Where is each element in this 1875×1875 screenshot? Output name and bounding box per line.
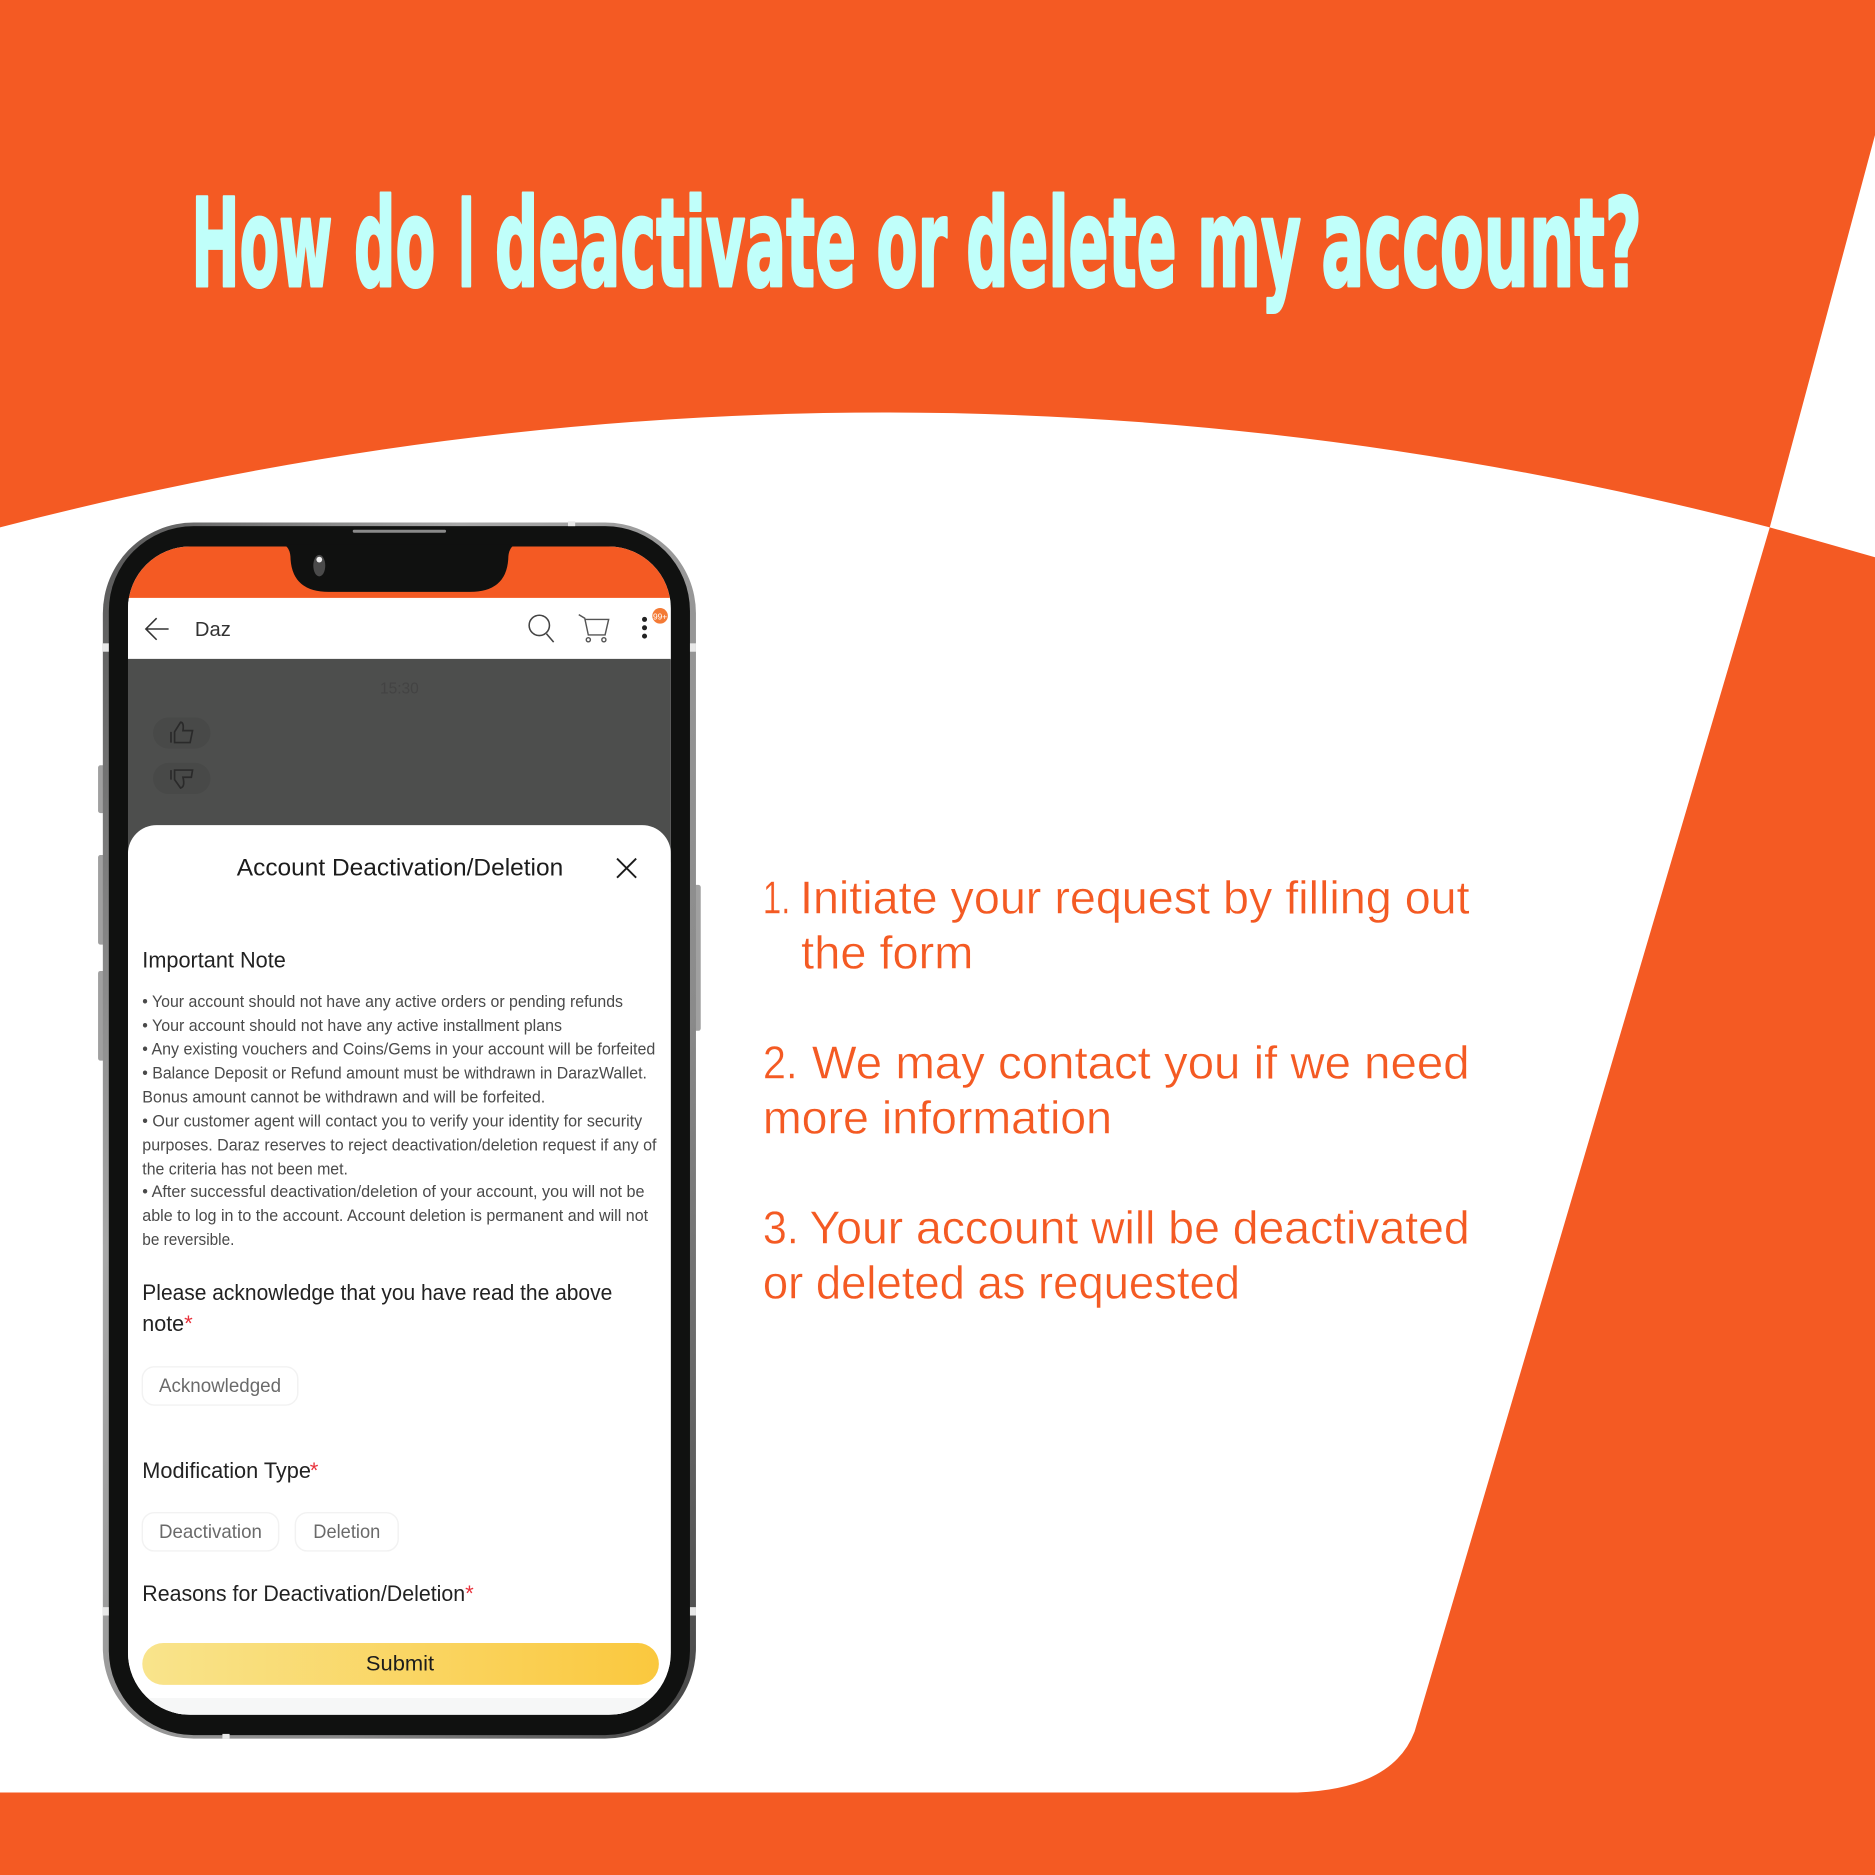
icon: thumbs up bbox=[170, 721, 194, 744]
step 1: Initiate your request by filling out bbox=[800, 872, 1470, 924]
modification type label: Modification Type bbox=[142, 1458, 311, 1483]
acknowledged chip bbox=[142, 1367, 298, 1405]
acknowledgement prompt bbox=[144, 1284, 612, 1331]
deactivation form sheet bbox=[128, 825, 671, 1734]
step 1: the form bbox=[801, 927, 973, 979]
title: I bbox=[458, 173, 475, 315]
deactivation chip: Deactivation bbox=[159, 1522, 262, 1543]
step 3: or deleted as requested bbox=[763, 1257, 1240, 1309]
important note text: purposes. Daraz reserves to reject deactivation/deletion request if any of bbox=[142, 1135, 657, 1154]
status bar bbox=[128, 546, 671, 599]
important note text: • Your account should not have any active installment plans bbox=[142, 1016, 562, 1035]
icon: camera bbox=[313, 555, 325, 576]
phone body bbox=[103, 521, 696, 1739]
chat name: Daz bbox=[195, 619, 231, 641]
important note text: the criteria has not been met. bbox=[142, 1159, 348, 1178]
icon: back arrow bbox=[146, 618, 169, 640]
app header bar bbox=[128, 598, 671, 660]
title: or bbox=[877, 173, 947, 315]
title: my bbox=[1197, 173, 1301, 315]
important note text: Bonus amount cannot be withdrawn and will be forfeited. bbox=[142, 1088, 545, 1107]
icon: cart bbox=[579, 615, 609, 642]
step 1 bbox=[763, 872, 1470, 979]
icon: notification badge: 99+ bbox=[653, 611, 667, 621]
title: delete bbox=[966, 173, 1177, 315]
reasons label: Reasons for Deactivation/Deletion bbox=[142, 1581, 465, 1606]
deactivation chip bbox=[142, 1513, 279, 1551]
step 3 bbox=[763, 1202, 1470, 1309]
important note text: • Balance Deposit or Refund amount must be withdrawn in DarazWallet. bbox=[142, 1064, 647, 1083]
icon: notification badge bbox=[652, 608, 668, 624]
step 1: 1. bbox=[763, 872, 790, 924]
deletion chip bbox=[295, 1513, 398, 1551]
title: How bbox=[191, 173, 332, 315]
important note text: • Any existing vouchers and Coins/Gems in your account will be forfeited bbox=[142, 1040, 655, 1059]
step 2: more information bbox=[763, 1092, 1112, 1144]
phone screen bbox=[128, 546, 671, 1734]
important note text: • Our customer agent will contact you to verify your identity for security bbox=[142, 1111, 643, 1130]
notch bbox=[282, 530, 517, 592]
important note text: • After successful deactivation/deletion of your account, you will not be bbox=[142, 1182, 645, 1201]
acknowledgement prompt: note bbox=[142, 1311, 184, 1336]
icon: search bbox=[529, 615, 554, 642]
important note heading: Important Note bbox=[142, 947, 286, 972]
important note text: be reversible. bbox=[142, 1230, 234, 1249]
icon: close bbox=[617, 859, 636, 878]
timestamp: 15:30 bbox=[380, 681, 419, 698]
antenna marks bbox=[103, 521, 696, 1739]
icon: menu dots bbox=[642, 617, 647, 639]
reasons label bbox=[144, 1585, 474, 1601]
step 2: 2. bbox=[763, 1037, 798, 1089]
step 3: Your account will be deactivated bbox=[810, 1202, 1470, 1254]
acknowledgement prompt: * bbox=[184, 1311, 193, 1336]
side buttons bbox=[98, 765, 701, 1061]
submit button: Submit bbox=[366, 1652, 434, 1676]
acknowledged chip: Acknowledged bbox=[159, 1376, 281, 1397]
important note text bbox=[142, 992, 657, 1249]
icon: thumbs down bbox=[170, 769, 194, 789]
sheet title: Account Deactivation/Deletion bbox=[237, 854, 563, 881]
title: do bbox=[354, 173, 435, 315]
phone mockup bbox=[98, 521, 701, 1739]
title bbox=[191, 173, 1642, 315]
important note text: • Your account should not have any active orders or pending refunds bbox=[142, 992, 623, 1011]
submit button bbox=[142, 1643, 659, 1685]
deletion chip: Deletion bbox=[313, 1522, 380, 1543]
bottom strip bbox=[128, 1698, 671, 1715]
acknowledgement prompt: Please acknowledge that you have read the above bbox=[142, 1280, 612, 1305]
step 2 bbox=[763, 1037, 1470, 1144]
dimmed chat area bbox=[128, 659, 671, 862]
reasons label: * bbox=[465, 1581, 474, 1606]
important note text: able to log in to the account. Account deletion is permanent and will not bbox=[142, 1206, 648, 1225]
title: deactivate bbox=[495, 173, 856, 315]
step 2: We may contact you if we need bbox=[812, 1037, 1470, 1089]
modification type label: * bbox=[310, 1458, 319, 1483]
step 3: 3. bbox=[763, 1202, 799, 1254]
